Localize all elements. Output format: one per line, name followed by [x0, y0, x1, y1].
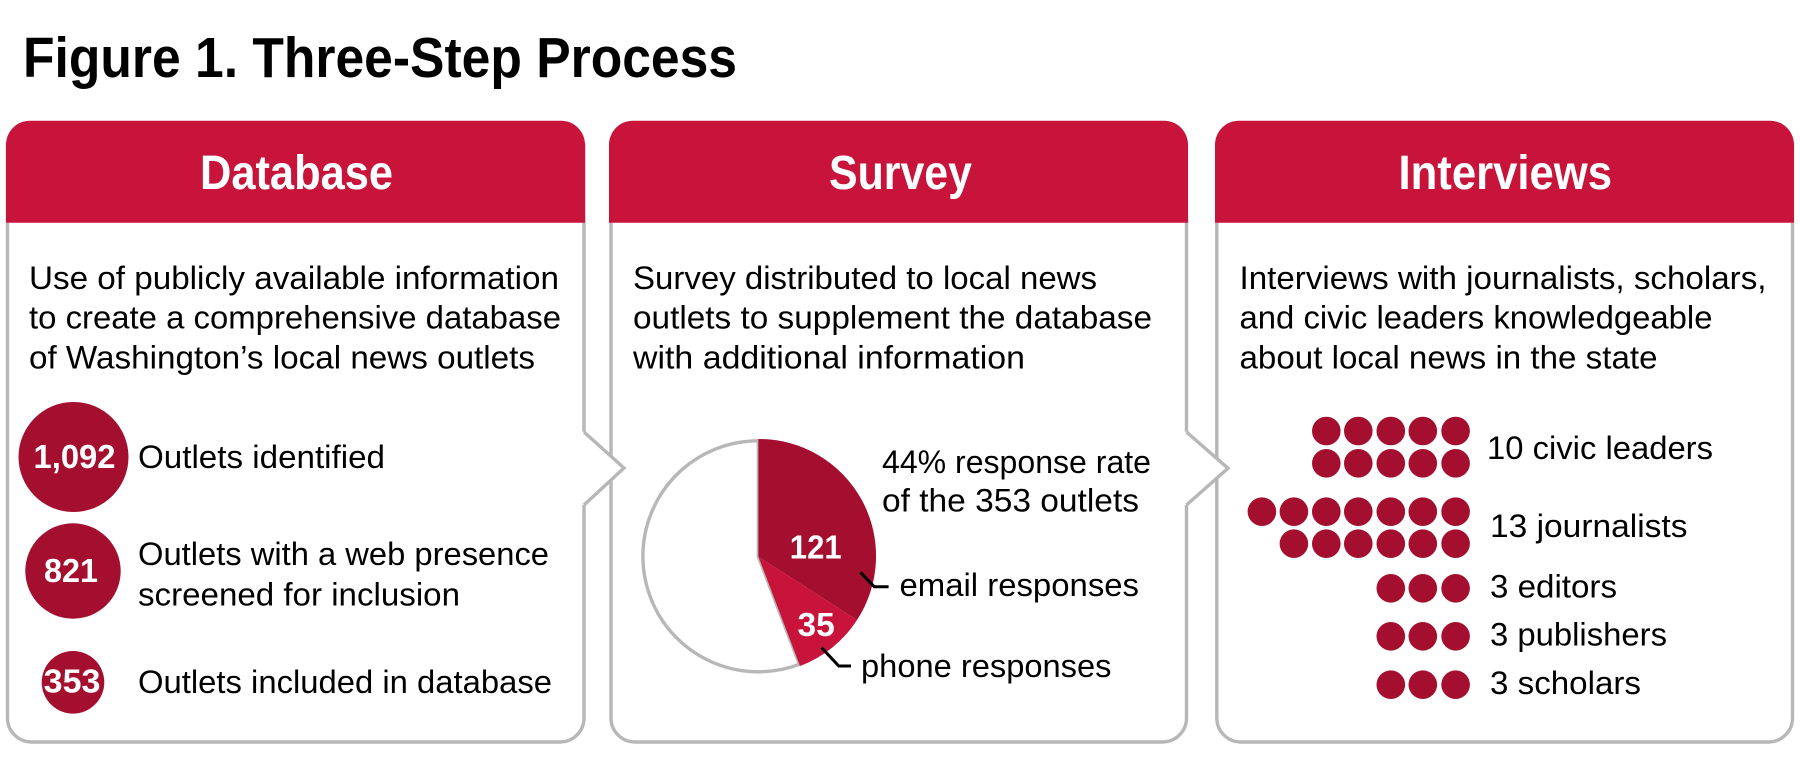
dots: 13 journalists [1248, 497, 1470, 558]
panel outline: survey [611, 145, 1186, 742]
dots: 10 civic leaders [1312, 417, 1470, 478]
text block: survey description: Survey distributed to local news [633, 260, 1097, 296]
text: response rate [882, 444, 1151, 518]
pie label: 35: 35 [798, 606, 835, 643]
panel header: database [6, 121, 585, 223]
panel header: survey [609, 121, 1188, 223]
text block: survey description: outlets to supplement the database [633, 300, 1152, 336]
heading: survey: Survey [829, 147, 972, 200]
panel: survey [609, 121, 1188, 742]
stat: 821 outlets with a web presence: screened for inclusion [138, 576, 460, 612]
arrow: survey to interviews [1184, 432, 1228, 505]
text block: database description [29, 260, 561, 376]
stat: 353 outlets included: Outlets included in database [138, 664, 552, 700]
text block: database description: Use of publicly available information [29, 260, 559, 296]
pie slice: 35 phone responses [758, 557, 857, 666]
text block: database description: of Washington’s local news outlets [29, 340, 535, 376]
title: Figure 1. Three-Step Process [23, 26, 737, 90]
stat: 1,092 outlets identified [18, 402, 385, 512]
text block: interviews description [1240, 260, 1766, 376]
label: 10 civic leaders: 10 civic leaders [1487, 430, 1713, 466]
dots: 3 editors [1376, 574, 1470, 603]
pie label: 121: 121 [790, 528, 842, 565]
stat: 353 outlets included [42, 651, 552, 714]
text block: survey description [632, 260, 1152, 376]
text block: interviews description: and civic leaders knowledgeable [1240, 300, 1712, 336]
pie slice: 121 email responses [758, 439, 876, 620]
text block: interviews description: about local news in the state [1240, 340, 1658, 376]
heading: interviews: Interviews [1398, 147, 1612, 200]
text: response rate: of the 353 outlets [882, 482, 1139, 518]
label: 3 editors: 3 editors [1490, 568, 1617, 604]
label: email responses: email responses [900, 567, 1139, 603]
stat: 353 outlets included: 353 [44, 663, 100, 700]
stat: 1,092 outlets identified: Outlets identified [138, 439, 385, 475]
label: 3 scholars: 3 scholars [1490, 665, 1641, 701]
label: phone responses: phone responses [861, 648, 1112, 684]
text: response rate: 44% response rate [882, 444, 1151, 480]
panel outline: interviews [1217, 145, 1792, 742]
stat: 821 outlets with a web presence [25, 523, 549, 619]
dots: 3 publishers [1376, 622, 1470, 651]
panel: interviews [1215, 121, 1794, 742]
panel: database [6, 121, 585, 742]
label: 3 publishers: 3 publishers [1490, 616, 1667, 652]
stat: 821 outlets with a web presence: 821 [44, 552, 98, 589]
heading: database: Database [200, 147, 393, 200]
panel header: interviews [1215, 121, 1794, 223]
text block: database description: to create a comprehensive database [29, 300, 561, 336]
stat: 821 outlets with a web presence: Outlets with a web presence [138, 536, 549, 572]
text block: survey description: with additional information [632, 340, 1025, 376]
panel outline: database [8, 145, 584, 742]
stat: 1,092 outlets identified: 1,092 [34, 438, 116, 475]
pie chart: survey responses [643, 439, 876, 672]
arrow: database to survey [581, 432, 624, 505]
dots: 3 scholars [1376, 670, 1470, 699]
leader line: phone [822, 648, 851, 666]
label: 13 journalists: 13 journalists [1490, 508, 1688, 544]
leader line: email [860, 572, 889, 587]
text block: interviews description: Interviews with journalists, scholars, [1240, 260, 1766, 296]
